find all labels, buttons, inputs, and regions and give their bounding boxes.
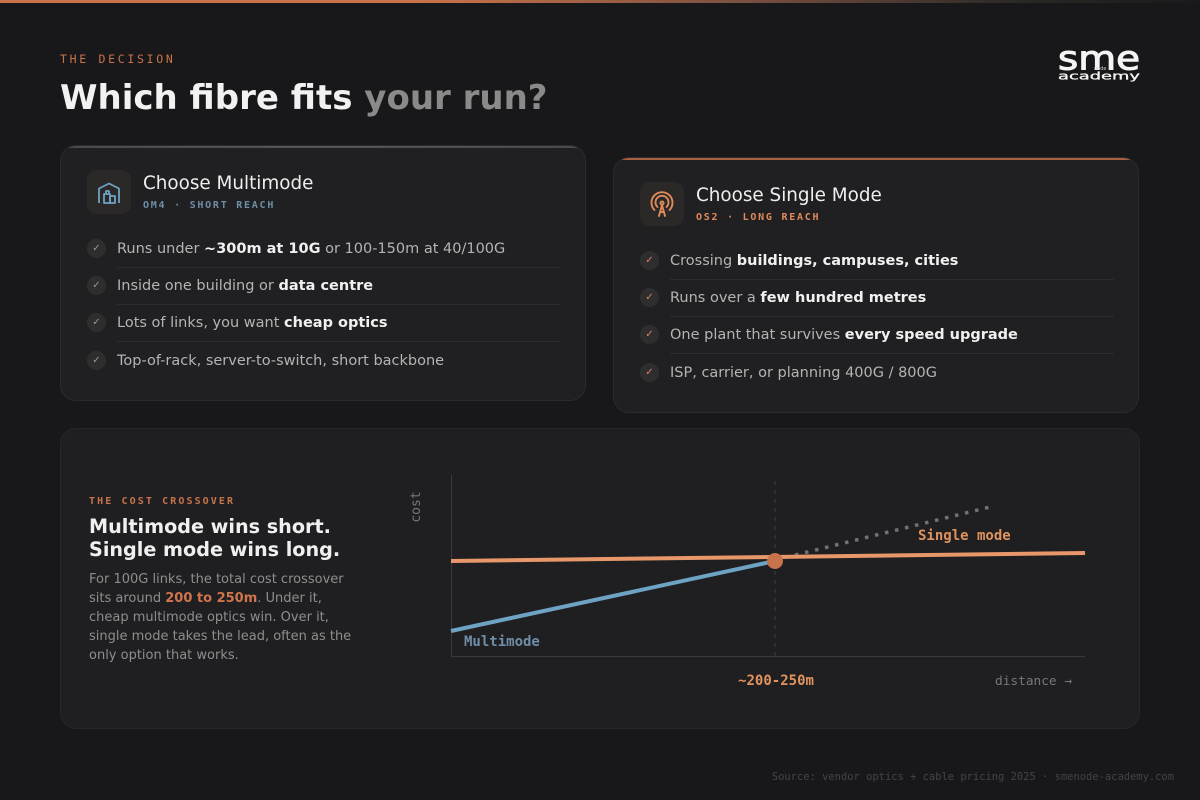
panel: choose multimode [60,145,586,401]
crossover description: sits around 200 to 250m. Under it, [89,591,322,606]
multimode line [451,561,775,631]
logo: node [1094,66,1106,72]
list row: Runs under ~300m at 10G or 100-150m at 40/100G [117,241,505,257]
list row [640,325,1114,354]
distance axis label: distance → [995,674,1072,689]
list row: Runs over a few hundred metres [670,290,926,306]
list row: ✓ [92,355,101,366]
list row [640,288,1114,317]
panel: cost crossover [60,428,1140,729]
list row: Lots of links, you want cheap optics [117,315,387,331]
single mode line [451,553,1085,561]
list row: ✓ [92,280,101,291]
crossover dot [767,553,783,569]
heading: Choose Single Mode [696,185,882,206]
panel: choose single mode [613,157,1139,413]
list row [640,251,1114,280]
eyebrow: THE DECISION [60,52,175,66]
crossover distance label: ~200-250m [738,673,814,689]
crossover description: only option that works. [89,648,239,663]
list row: ✓ [92,243,101,254]
dotted single mode projection [775,507,990,560]
icon: building [87,170,131,214]
crossover heading: Single mode wins long. [89,538,340,561]
list row: ✓ [645,367,654,378]
list row: ✓ [645,329,654,340]
subheading: OS2 · LONG REACH [696,212,820,223]
top border accent [614,158,1140,160]
crossover eyebrow: THE COST CROSSOVER [89,496,235,507]
multimode label: Multimode [464,634,540,650]
list row [87,313,561,342]
cost axis label: cost [409,491,424,523]
crossover description: cheap multimode optics win. Over it, [89,610,329,625]
top accent bar [0,0,1200,3]
title: Which fibre fits your run? [60,78,548,118]
crossover description [89,572,351,663]
heading: Choose Multimode [143,173,313,194]
list row: ✓ [92,317,101,328]
crossover heading [89,515,340,561]
crossover marker line [774,481,776,656]
list row: Inside one building or data centre [117,278,373,294]
single mode label: Single mode [918,528,1011,544]
crossover heading: Multimode wins short. [89,515,331,538]
list row: ✓ [645,255,654,266]
list row: ISP, carrier, or planning 400G / 800G [670,365,937,381]
subheading: OM4 · SHORT REACH [143,200,275,211]
list row: One plant that survives every speed upgrade [670,327,1018,343]
crossover description: single mode takes the lead, often as the [89,629,351,644]
icon: antenna [640,182,684,226]
list row [87,276,561,305]
axes [452,475,1085,656]
crossover chart [409,475,1086,689]
list row: ✓ [645,292,654,303]
logo: academy [1058,70,1140,82]
list row [87,239,561,268]
list row: Top-of-rack, server-to-switch, short backbone [117,353,444,369]
top border highlight [61,146,587,148]
source footnote: Source: vendor optics + cable pricing 2025 · smenode-academy.com [772,771,1174,783]
crossover description: For 100G links, the total cost crossover [89,572,344,587]
list row: Crossing buildings, campuses, cities [670,253,958,269]
